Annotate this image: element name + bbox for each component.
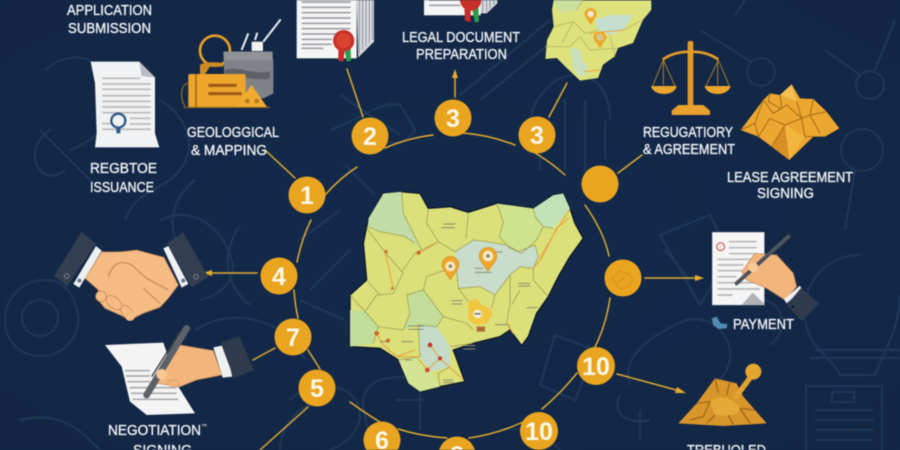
node 10 lower: 10 (525, 418, 553, 446)
label: application submission: SUBMISSION (68, 21, 151, 37)
label: regbtoe issuance: ISSUANCE (90, 180, 154, 196)
icon: legal documents with seal (424, 0, 497, 23)
label: regulatory and agreement (643, 125, 735, 158)
label: legal document preparation: PREPARATION (416, 47, 507, 63)
icon: handshake (54, 232, 208, 322)
icon: scales of justice (651, 41, 731, 115)
node 5 (298, 370, 336, 406)
node 3 right: 3 (530, 122, 544, 150)
node 4 (260, 258, 298, 294)
node 3 right (518, 116, 556, 154)
label: geological and mapping: & MAPPING (191, 143, 267, 159)
node 3 top: 3 (446, 105, 460, 133)
label: regbtoe issuance: REGBTOE (90, 161, 157, 177)
node 6 (364, 422, 400, 450)
icon: small payment bird mark (712, 317, 727, 329)
arrows from step nodes (203, 69, 704, 393)
label: negotiation signing (108, 423, 207, 450)
blank node upper right (582, 166, 618, 202)
icon: gold mound with shovel (678, 364, 767, 426)
node 4: 4 (272, 263, 286, 291)
icon: small Nigeria map (545, 0, 652, 81)
label: legal document preparation: LEGAL DOCUMENT (402, 30, 520, 46)
label: geological and mapping: GEOLOGGICAL (187, 125, 279, 141)
node 7 (274, 318, 312, 356)
node 1 (288, 176, 326, 214)
label: legal document preparation (402, 30, 520, 63)
label: lease agreement signing: SIGNING (757, 186, 814, 202)
node 3 top (434, 100, 472, 136)
icon: payment document and hand with pen (712, 232, 819, 321)
connecting ring and leader lines (253, 69, 642, 450)
label: application submission: APPLICATION (67, 3, 152, 19)
blank node right with texture (604, 260, 642, 296)
node 10 lower (520, 412, 558, 450)
node 7: 7 (286, 324, 300, 352)
icon: geological equipment (182, 19, 281, 107)
node 10 right (577, 347, 615, 385)
node 2: 2 (363, 123, 377, 151)
node 1: 1 (300, 182, 314, 210)
central Nigeria map (350, 192, 583, 393)
label: negotiation signing: NEGOTIATION (108, 423, 201, 439)
map pin (479, 247, 497, 271)
icon: permit document (91, 62, 159, 147)
icon: gold ore pile (741, 84, 839, 160)
icon: stacked certificate documents (297, 0, 374, 62)
label: negotiation signing: ™ (201, 423, 207, 430)
node 5: 5 (310, 375, 324, 403)
label: regulatory and agreement: & AGREEMENT (643, 142, 735, 158)
node 2 (352, 118, 388, 154)
step nodes (260, 100, 642, 450)
label: payment: PAYMENT (733, 317, 794, 333)
label: lease agreement signing (727, 170, 853, 202)
label: application submission (67, 3, 152, 37)
label: regulatory and agreement: REGUGATIORY (643, 125, 733, 141)
map pin (442, 256, 459, 280)
node 8 (438, 436, 476, 450)
label: geological and mapping (187, 125, 279, 159)
icon: hand signing a paper (105, 328, 254, 415)
node 10 right: 10 (582, 353, 610, 381)
label: lease agreement signing: LEASE AGREEMENT (727, 170, 853, 186)
label: regbtoe issuance (90, 161, 157, 196)
map pin (473, 310, 482, 318)
